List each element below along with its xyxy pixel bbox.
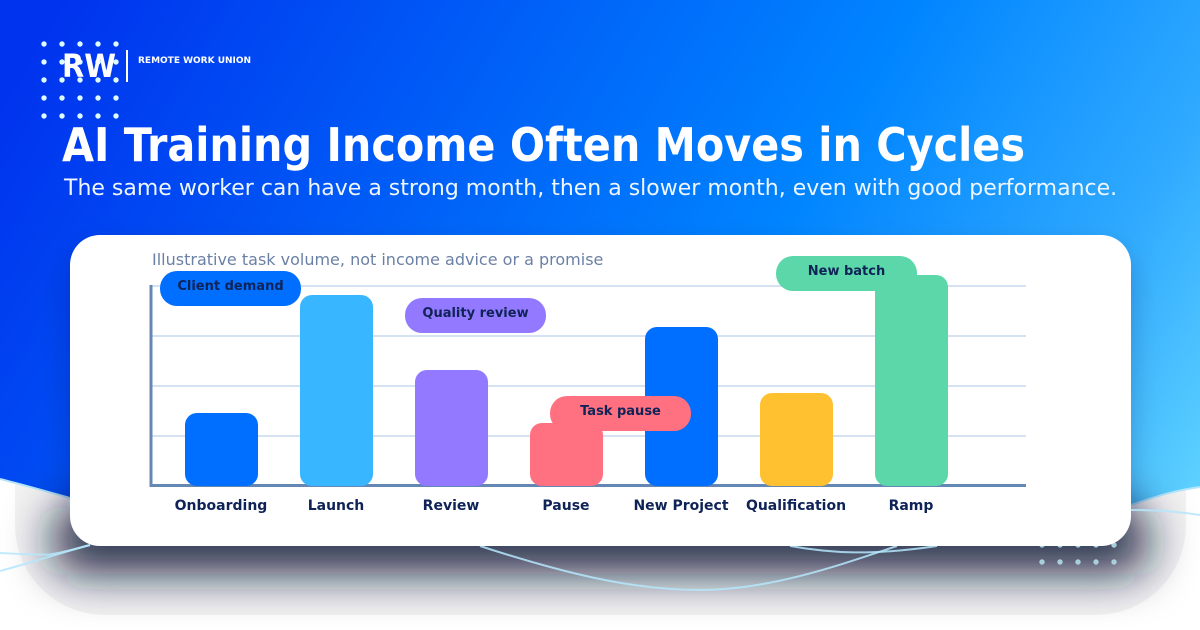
callout: New batch: New batch [808,264,885,279]
category labels: New Project [633,498,729,514]
bar: Review [415,370,488,486]
card shadow [52,250,1149,574]
title: AI Training Income Often Moves in Cycles [62,118,1025,172]
category labels [175,498,933,514]
callout: Client demand: Client demand [177,279,284,294]
bar chart [151,256,1026,514]
chart caption: Illustrative task volume, not income advice or a promise [152,250,603,269]
callout: Quality review: Quality review [422,306,529,321]
category labels: Review [423,498,479,514]
logo: Remote Work Union [62,47,251,85]
callout: Task pause: Task pause [580,404,661,419]
decorative wave lines [0,510,1200,590]
bar: Ramp [875,275,948,486]
outer shadow band [15,400,1186,615]
bar: Pause [530,423,603,486]
category labels: Pause [542,498,590,514]
callout: Task pause [550,396,691,431]
callout: New batch [776,256,917,291]
logo: Remote Work Union: REMOTE WORK UNION [138,56,251,66]
bar: New Project [645,327,718,486]
dot grid: top left [41,41,119,119]
bar: Qualification [760,393,833,486]
callout: Quality review [405,298,546,333]
category labels: Onboarding [175,498,267,514]
callout: Client demand [160,271,301,306]
wave edge line [0,479,1200,505]
subtitle: The same worker can have a strong month, then a slower month, even with good performance. [63,176,1117,201]
category labels: Ramp [889,498,933,514]
logo: Remote Work Union: RW [62,47,116,85]
dot grid: bottom right [1039,542,1117,565]
bar: Onboarding [185,413,258,486]
category labels: Launch [308,498,364,514]
category labels: Qualification [746,498,846,514]
bar: Launch [300,295,373,486]
panel: chart card [70,235,1131,546]
